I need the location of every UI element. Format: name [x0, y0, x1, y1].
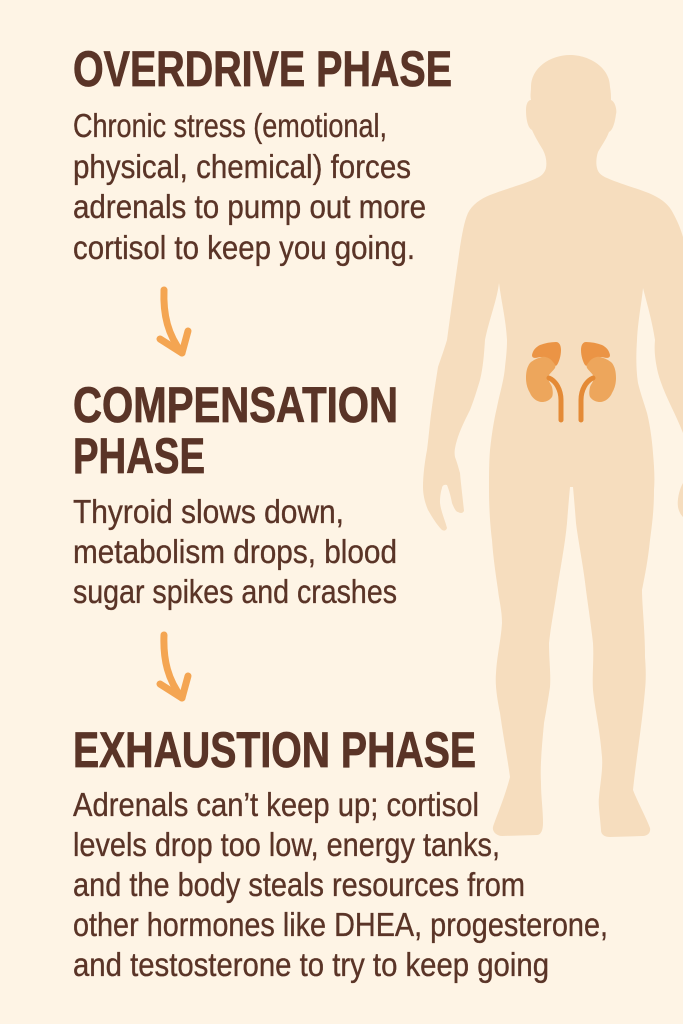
right kidney with adrenal gland and ureter [581, 342, 616, 420]
text block: exhaustion description: and the body steals resources from [73, 866, 525, 903]
arrow: overdrive to compensation [160, 290, 188, 353]
text block: overdrive description [73, 107, 426, 266]
icon: kidneys and adrenal glands [526, 342, 616, 420]
heading: overdrive phase: OVERDRIVE PHASE [73, 41, 452, 97]
text block: exhaustion description: and testosterone to try to keep going [73, 946, 549, 983]
heading: compensation phase: PHASE [73, 428, 205, 484]
body silhouette [423, 55, 683, 837]
heading: compensation phase [73, 377, 398, 484]
text block: overdrive description: adrenals to pump out more [73, 188, 426, 225]
text block: overdrive description: cortisol to keep you going. [73, 229, 415, 266]
text block: compensation description: sugar spikes and crashes [73, 573, 397, 610]
text block: exhaustion description: other hormones like DHEA, progesterone, [73, 906, 608, 943]
arrow: compensation to exhaustion [160, 635, 188, 698]
text block: overdrive description: physical, chemical) forces [73, 148, 411, 185]
heading: exhaustion phase: EXHAUSTION PHASE [73, 722, 476, 778]
text block: compensation description [73, 493, 397, 610]
text block: overdrive description: Chronic stress (emotional, [73, 107, 387, 144]
text block: exhaustion description: levels drop too low, energy tanks, [73, 826, 500, 863]
left kidney with adrenal gland and ureter [526, 342, 561, 420]
text block: compensation description: metabolism drops, blood [73, 533, 397, 570]
text block: compensation description: Thyroid slows down, [73, 493, 344, 530]
heading: compensation phase: COMPENSATION [73, 377, 398, 433]
text block: exhaustion description: Adrenals can’t keep up; cortisol [73, 786, 479, 823]
text block: exhaustion description [73, 786, 608, 983]
